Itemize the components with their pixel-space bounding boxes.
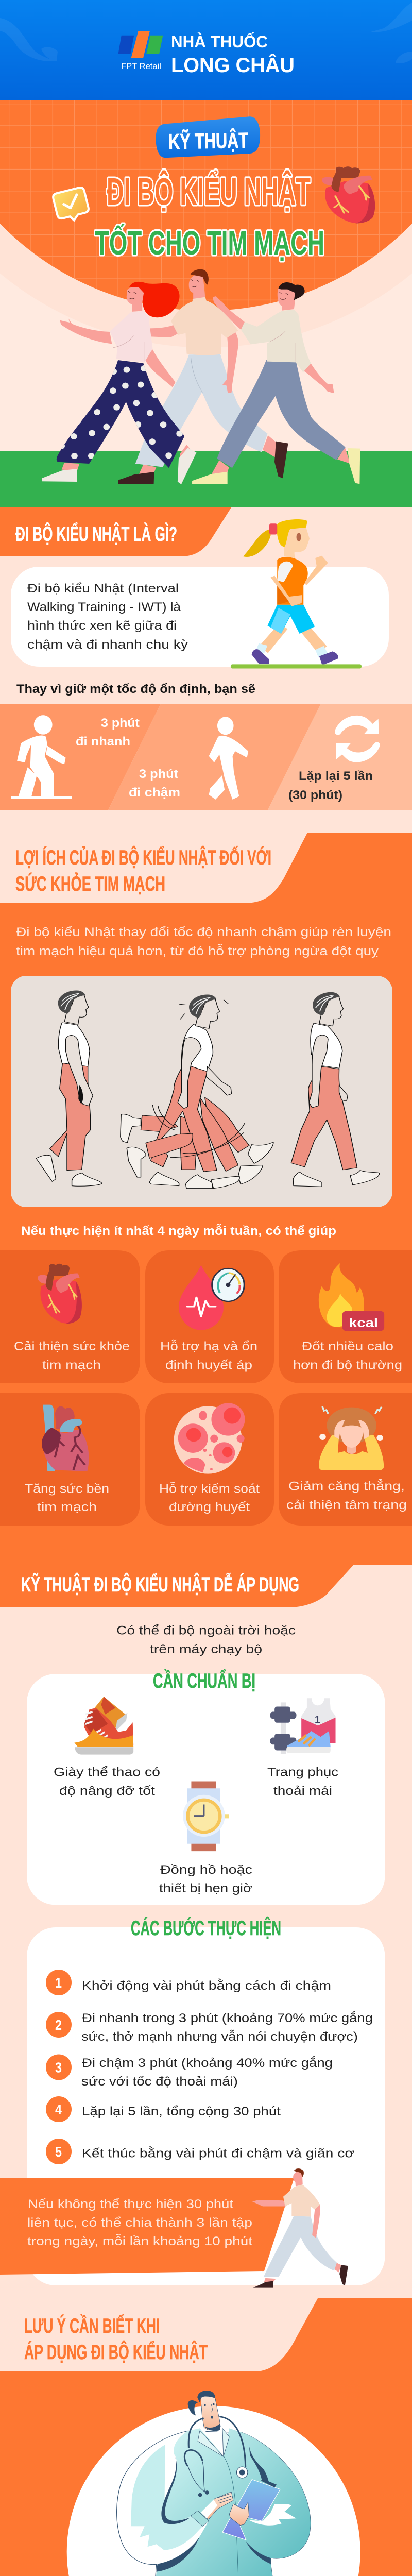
heading: what is it: ĐI BỘ KIỂU NHẬT LÀ GÌ? [15,521,177,546]
card text [160,1340,258,1372]
heading: benefits: SỨC KHỎE TIM MẠCH [15,872,165,895]
title badge: KỸ THUẬT [168,128,249,154]
logo text: FPT Retail [121,61,161,71]
left sleeve [131,2445,208,2550]
figure: standing step [36,990,102,1186]
icon: flame [319,1263,384,1331]
icon: anatomical heart [42,1405,89,1471]
card text: Cải thiện sức khỏe [14,1340,130,1353]
card text: Hỗ trợ kiểm soát [159,1482,260,1496]
icon: sports outfit: 1 [315,1715,320,1725]
woman's shirt [110,311,152,362]
card text [286,1479,407,1512]
callout: split sessions [0,2178,294,2275]
label: repeat: (30 phút) [288,788,342,802]
icon: heart [38,1264,82,1324]
panel: preparation [27,1668,385,1905]
woman's feet [42,445,196,484]
heading: benefits: LỢI ÍCH CỦA ĐI BỘ KIỂU NHẬT ĐỐI VỚI [15,845,271,869]
clipboard [222,2479,280,2540]
benefits intro text: tim mạch hiệu quả hơn, từ đó hỗ trợ phòng ngừa đột quỵ [16,944,379,958]
orange section background: notes [0,2298,412,2576]
card text: đường huyết [169,1500,250,1514]
label: fast: 3 phút [101,716,140,730]
brand name [171,32,295,77]
woman's hair [129,282,180,317]
panel: steps [27,1916,385,2285]
icon: blood cells [174,1403,245,1474]
heading: notes: ÁP DỤNG ĐI BỘ KIỂU NHẬT [24,2340,208,2364]
card text: định huyết áp [165,1358,252,1372]
man's head [189,269,209,299]
step 3: Đi chậm 3 phút (khoảng 40% mức gắng [82,2056,333,2070]
kcal label: kcal [349,1316,378,1330]
heading: notes [24,2314,208,2364]
definition text: Walking Training - IWT) là [27,600,181,614]
label: sneakers: độ nâng đỡ tốt [59,1784,155,1798]
hero background [0,100,412,310]
definition text: Đi bộ kiểu Nhật (Interval [27,582,179,596]
card: calories [279,1250,412,1383]
orange section background: benefits and technique heading [0,833,412,1607]
card: endurance [0,1393,140,1526]
subheading: instead of steady pace: Thay vì giữ một tốc độ ổn định, bạn sẽ [16,682,255,696]
coat shadows [157,2446,271,2572]
card text: tim mạch [37,1500,97,1514]
illustration: walking girl [231,519,362,669]
step 4 [46,2096,281,2122]
label: slow: 3 phút [139,767,178,781]
label: watch: thiết bị hẹn giờ [159,1882,252,1895]
icon: slow walker [209,717,248,800]
step 1: 1 [55,1975,62,1991]
woman 2 pants [217,360,346,468]
step 1 [46,1970,331,1995]
brand name: NHÀ THUỐC [171,32,268,51]
man back leg and shoes [118,354,288,484]
label: sneakers: Giày thể thao có [54,1765,160,1780]
figure: mid stride with motion [121,994,273,1189]
step 3 [46,2055,333,2089]
panel: interval stripes [0,704,412,810]
label: repeat: Lặp lại 5 lần [299,769,373,783]
collar [198,2428,229,2456]
card text [159,1482,260,1514]
logo mark [118,31,163,58]
icon: check bubble [52,187,91,224]
icon: sports outfit [270,1698,336,1754]
icon: sneakers [74,1697,133,1755]
callout text: trong ngày, mỗi lần khoảng 10 phút [27,2234,252,2248]
label: outfit [267,1765,338,1798]
definition text: hình thức xen kẽ giữa đi [27,619,177,633]
icon: watch [183,1782,229,1851]
woman's hanging arm [144,349,176,387]
icon: heart [322,166,375,223]
card text: tim mạch [42,1358,101,1372]
subheading: at least four days: Nếu thực hiện ít nhất 4 ngày mỗi tuần, có thể giúp [21,1224,336,1238]
woman 2 shirt [241,310,311,372]
man's shirt [171,296,238,355]
white circle backdrop [67,2406,360,2576]
hands [191,2492,249,2526]
benefits intro text: Đi bộ kiểu Nhật thay đổi tốc độ nhanh chậm giúp rèn luyện [16,925,391,939]
title badge [156,116,260,158]
step 5: 5 [55,2144,62,2160]
step 3: 3 [55,2060,62,2075]
illustration: walking figures [36,990,380,1189]
label: fast: đi nhanh [76,735,130,749]
label: outfit: thoải mái [273,1784,332,1798]
callout text [27,2197,252,2248]
coat centre line [224,2456,239,2576]
intro: where to walk: Có thể đi bộ ngoài trời hoặc [116,1624,296,1637]
intro: where to walk: trên máy chạy bộ [150,1642,262,1656]
label: watch: Đồng hồ hoặc [160,1863,252,1877]
ground [0,451,412,507]
callout text: liên tục, có thể chia thành 3 lần tập [27,2216,252,2230]
label: watch [159,1863,252,1895]
step 5 [46,2139,354,2164]
card text: Giảm căng thẳng, [288,1479,405,1493]
step 5: Kết thúc bằng vài phút đi chậm và giãn cơ [82,2146,354,2161]
card text: hơn đi bộ thường [293,1358,402,1372]
card: improve cardiovascular health [0,1250,140,1383]
label: slow: đi chậm [129,786,180,800]
woman's head [127,287,144,312]
panel: walking sequence [11,976,392,1207]
panel: definition [11,567,389,667]
illustration: three walkers [42,269,360,484]
woman's polka dot pants [57,360,184,468]
card: blood pressure [145,1250,274,1383]
header band [0,0,412,100]
woman's front arm [60,318,112,344]
brand name: LONG CHÂU [171,53,295,77]
section heading panel: what is it [0,507,231,556]
label: slow [129,767,180,800]
intro: where to walk [116,1624,296,1656]
card text: cải thiện tâm trạng [286,1498,407,1512]
illustration: walking man [252,2168,348,2288]
woman 2 lower arm [304,364,334,393]
card: stress and mood [279,1393,412,1526]
woman 2 head [278,282,305,311]
stethoscope [184,2417,248,2497]
card text: Hỗ trợ hạ và ổn [160,1340,258,1353]
head [188,2391,220,2431]
coat silhouette [117,2431,311,2576]
illustration: doctor [117,2391,311,2576]
step 2: sức, thở mạnh nhưng vẫn nói chuyện được) [81,2030,358,2044]
heading: steps: CÁC BƯỚC THỰC HIỆN [131,1916,281,1940]
man's hanging arm [222,332,238,393]
right sleeve highlight [249,2504,296,2526]
woman 2 hand on shoulder [213,296,245,330]
label: fast [76,716,140,749]
label: sneakers [54,1765,160,1798]
step 2: Đi nhanh trong 3 phút (khoảng 70% mức gắng [82,2011,373,2025]
heading: benefits [15,845,271,895]
card text: Đốt nhiều calo [302,1340,393,1353]
card: blood sugar [145,1393,274,1526]
step 4: Lặp lại 5 lần, tổng cộng 30 phút [82,2105,281,2119]
heading: notes: LƯU Ý CẦN BIẾT KHI [24,2314,160,2337]
benefits intro text [16,925,391,958]
label: outfit: Trang phục [267,1765,338,1780]
step 1: Khởi động vài phút bằng cách đi chậm [82,1979,331,1993]
heading: preparation: CẦN CHUẨN BỊ [153,1668,255,1692]
definition text: chậm và đi nhanh chu kỳ [27,638,188,652]
step 3: sức với tốc độ thoải mái) [81,2075,238,2089]
icon: repeat arrows [335,716,380,762]
callout text: Nếu không thể thực hiện 30 phút [28,2197,233,2211]
step 2 [46,2011,373,2044]
woman's back arm [150,325,178,337]
card text [293,1340,402,1372]
definition text [27,582,188,652]
figure: forward stride [291,992,380,1187]
icon: stressed person [319,1406,384,1470]
card text [14,1340,130,1372]
icon: blood drop with gauge [179,1265,244,1330]
label: repeat [288,769,373,802]
torso [154,2428,311,2576]
step 2: 2 [55,2017,62,2033]
card text [25,1482,109,1514]
step 4: 4 [55,2102,62,2117]
card text: Tăng sức bền [25,1482,109,1496]
woman 2 feet [192,447,360,484]
icon: fast walker [11,715,72,799]
